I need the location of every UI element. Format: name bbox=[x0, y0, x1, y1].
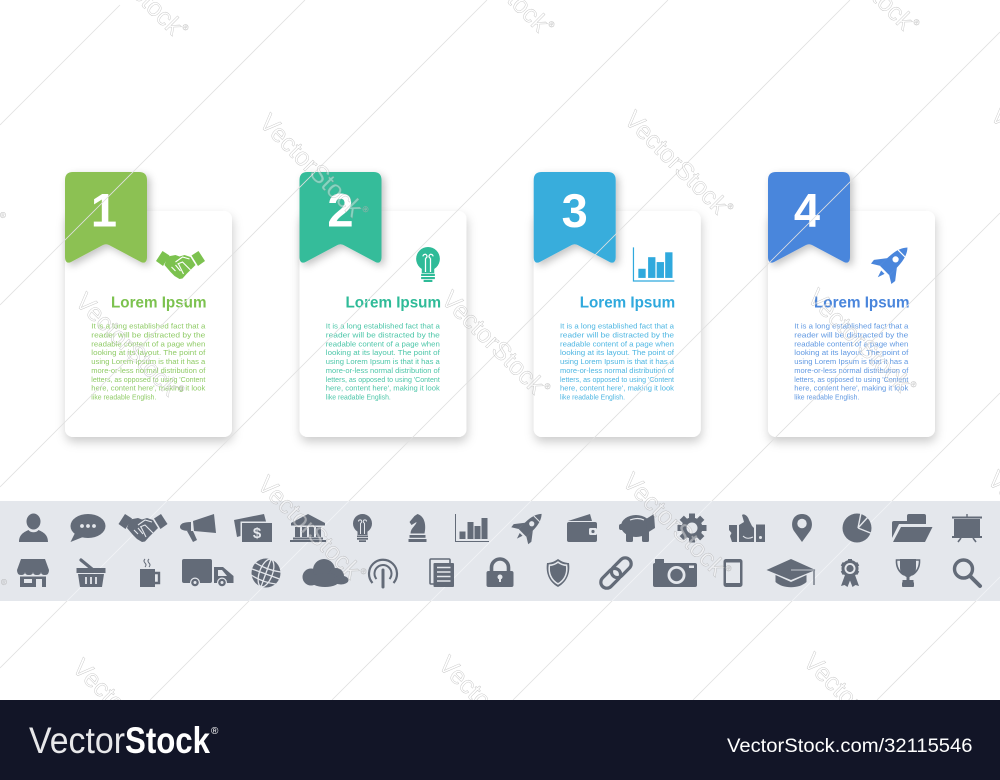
watermarks: ® bbox=[542, 381, 553, 392]
icon: coffee cup bbox=[140, 559, 159, 587]
card 3 text bbox=[560, 322, 675, 402]
card 4 ribbon bbox=[768, 172, 850, 263]
watermarks: ® bbox=[0, 211, 6, 220]
card 1 text: like readable English. bbox=[91, 392, 156, 402]
card 2 text: like readable English. bbox=[326, 392, 391, 402]
icon: pie chart bbox=[842, 513, 873, 542]
icon: user bbox=[19, 514, 48, 542]
card 3 text: It is a long established fact that a bbox=[560, 322, 675, 330]
card 3 ribbon bbox=[534, 172, 616, 263]
card 2 text: here, content here', making it look bbox=[326, 384, 440, 393]
card 2 text: letters, as opposed to using 'Content bbox=[326, 375, 441, 384]
card 3 text: more-or-less normal distribution of bbox=[560, 366, 675, 375]
icon: camera bbox=[653, 559, 697, 587]
card 3 body bbox=[534, 211, 701, 437]
icon: bank bbox=[290, 514, 326, 542]
card 3 text: like readable English. bbox=[560, 392, 625, 402]
watermarks: ® bbox=[908, 379, 919, 390]
card 4 text: looking at its layout. The point of bbox=[794, 348, 909, 357]
icon: smartphone bbox=[724, 559, 742, 587]
icon: folder bbox=[892, 514, 932, 542]
watermarks: Vector bbox=[798, 647, 868, 717]
card 2 text: more-or-less normal distribution of bbox=[326, 366, 441, 375]
card 1 ribbon bbox=[65, 172, 147, 263]
card 2 text: reader will be distracted by the bbox=[326, 330, 440, 339]
footer logo bbox=[29, 720, 219, 761]
card 4 text: readable content of a page when bbox=[794, 339, 908, 348]
icon: trophy bbox=[896, 559, 920, 587]
card 2 heading: Lorem Ipsum bbox=[346, 294, 441, 312]
card 3 number: 3 bbox=[562, 184, 588, 237]
panel: card 1 bbox=[65, 172, 232, 437]
icon: documents bbox=[430, 559, 454, 587]
card 1 text bbox=[91, 322, 206, 402]
panel: card 2 bbox=[300, 172, 466, 437]
watermarks: VectorStock bbox=[252, 470, 366, 585]
card 2 number: 2 bbox=[327, 184, 354, 236]
card 4 body bbox=[768, 211, 935, 437]
card 3 text: reader will be distracted by the bbox=[560, 330, 674, 339]
card 4 number: 4 bbox=[794, 184, 820, 236]
card 4 text bbox=[794, 322, 909, 402]
icon: bar chart bbox=[633, 247, 674, 282]
watermarks: ® bbox=[358, 566, 369, 577]
card 4 text: more-or-less normal distribution of bbox=[794, 366, 909, 375]
card 1 text: reader will be distracted by the bbox=[91, 330, 205, 339]
watermarks: VectorStock bbox=[802, 283, 916, 398]
icon: magnifier bbox=[954, 560, 980, 586]
panel: card 4 bbox=[768, 172, 935, 437]
card 1 text: letters, as opposed to using 'Content bbox=[91, 375, 206, 384]
watermarks: Vector bbox=[67, 653, 137, 723]
card 2 ribbon bbox=[300, 172, 382, 263]
watermarks: VectorStock bbox=[254, 108, 368, 223]
panel: icon band bbox=[0, 501, 1000, 601]
card 2 text: It is a long established fact that a bbox=[326, 322, 441, 330]
watermarks: Vector bbox=[433, 650, 503, 720]
icon: money: $ bbox=[253, 525, 262, 542]
watermarks: ® bbox=[180, 22, 191, 33]
footer bar bbox=[0, 700, 1000, 780]
watermarks: ® bbox=[911, 17, 922, 28]
card 4 heading: Lorem Ipsum bbox=[814, 294, 910, 312]
icon: chat bubble bbox=[70, 514, 106, 542]
card 1 text: here, content here', making it look bbox=[91, 384, 205, 393]
card 2 body bbox=[300, 211, 466, 437]
icon: presentation board bbox=[952, 514, 982, 542]
card 3 heading: Lorem Ipsum bbox=[580, 294, 675, 312]
card 4 text: reader will be distracted by the bbox=[794, 330, 908, 339]
icon: cloud bbox=[302, 559, 348, 587]
card 1 heading: Lorem Ipsum bbox=[111, 294, 206, 312]
card 3 text: letters, as opposed to using 'Content bbox=[560, 375, 675, 384]
icon: graduation cap bbox=[766, 559, 816, 587]
icon: handshake bbox=[118, 514, 168, 542]
icon: medal ribbon bbox=[841, 559, 859, 587]
icon: chain link bbox=[598, 555, 634, 591]
icon: piggy bank bbox=[619, 514, 655, 542]
card 1 text: readable content of a page when bbox=[91, 339, 205, 348]
watermarks: VectorStock bbox=[619, 105, 733, 220]
card 4 text: It is a long established fact that a bbox=[794, 322, 909, 330]
icon: signal bbox=[369, 560, 397, 587]
card 2 text: using Lorem Ipsum is that it has a bbox=[326, 357, 441, 366]
icon set bbox=[17, 505, 982, 592]
watermarks: ® bbox=[725, 201, 736, 212]
card 1 text: more-or-less normal distribution of bbox=[91, 366, 206, 375]
icon: map pin bbox=[792, 514, 812, 542]
card 4 text: using Lorem Ipsum is that it has a bbox=[794, 357, 909, 366]
card 2 text: readable content of a page when bbox=[326, 339, 440, 348]
watermarks: ® bbox=[1, 578, 7, 587]
footer image id: VectorStock.com/32115546 bbox=[727, 736, 972, 757]
watermarks: ® bbox=[360, 204, 371, 215]
watermarks: VectorStock bbox=[436, 285, 550, 400]
card 3 text: readable content of a page when bbox=[560, 339, 674, 348]
watermarks: ® bbox=[546, 19, 557, 30]
icon: megaphone bbox=[180, 514, 216, 542]
icon: basket bbox=[76, 560, 106, 587]
footer logo: Vector bbox=[29, 720, 125, 761]
card 3 text: using Lorem Ipsum is that it has a bbox=[560, 357, 675, 366]
card 4 text: like readable English. bbox=[794, 392, 859, 402]
watermarks: ® bbox=[723, 563, 734, 574]
panel: card 3 bbox=[534, 172, 701, 437]
watermarks: ® bbox=[176, 383, 187, 394]
watermarks: VectorStock bbox=[617, 467, 731, 582]
icon: rocket bbox=[508, 505, 550, 547]
card 3 text: here, content here', making it look bbox=[560, 384, 674, 393]
icon: globe bbox=[247, 554, 285, 592]
card 1 text: looking at its layout. The point of bbox=[91, 348, 206, 357]
icon: money bbox=[234, 514, 272, 542]
icon: rocket bbox=[867, 237, 918, 288]
footer logo: ® bbox=[211, 726, 219, 737]
icon: chess knight bbox=[408, 514, 426, 542]
icon: bar chart bbox=[455, 514, 489, 542]
card 2 text bbox=[326, 322, 441, 402]
card 1 body bbox=[65, 211, 232, 437]
icon: wallet bbox=[567, 514, 597, 542]
footer logo: Stock bbox=[125, 720, 210, 761]
icon: gear bbox=[678, 514, 706, 542]
card 4 text: here, content here', making it look bbox=[794, 384, 908, 393]
watermarks: VectorStock bbox=[70, 287, 184, 402]
card 1 text: It is a long established fact that a bbox=[91, 322, 206, 330]
icon: shop bbox=[17, 559, 49, 587]
icon: light bulb bbox=[416, 247, 440, 282]
icon: padlock bbox=[486, 559, 514, 587]
icon: shield bbox=[547, 559, 569, 587]
card 3 text: looking at its layout. The point of bbox=[560, 348, 675, 357]
icon: truck bbox=[182, 559, 234, 588]
icon: handshake bbox=[156, 251, 205, 279]
card 1 text: using Lorem Ipsum is that it has a bbox=[91, 357, 206, 366]
icon: light bulb bbox=[353, 514, 372, 542]
card 2 text: looking at its layout. The point of bbox=[326, 348, 441, 357]
icon: thumbs up bbox=[729, 514, 765, 542]
card 4 text: letters, as opposed to using 'Content bbox=[794, 375, 909, 384]
card 1 number: 1 bbox=[91, 184, 117, 236]
